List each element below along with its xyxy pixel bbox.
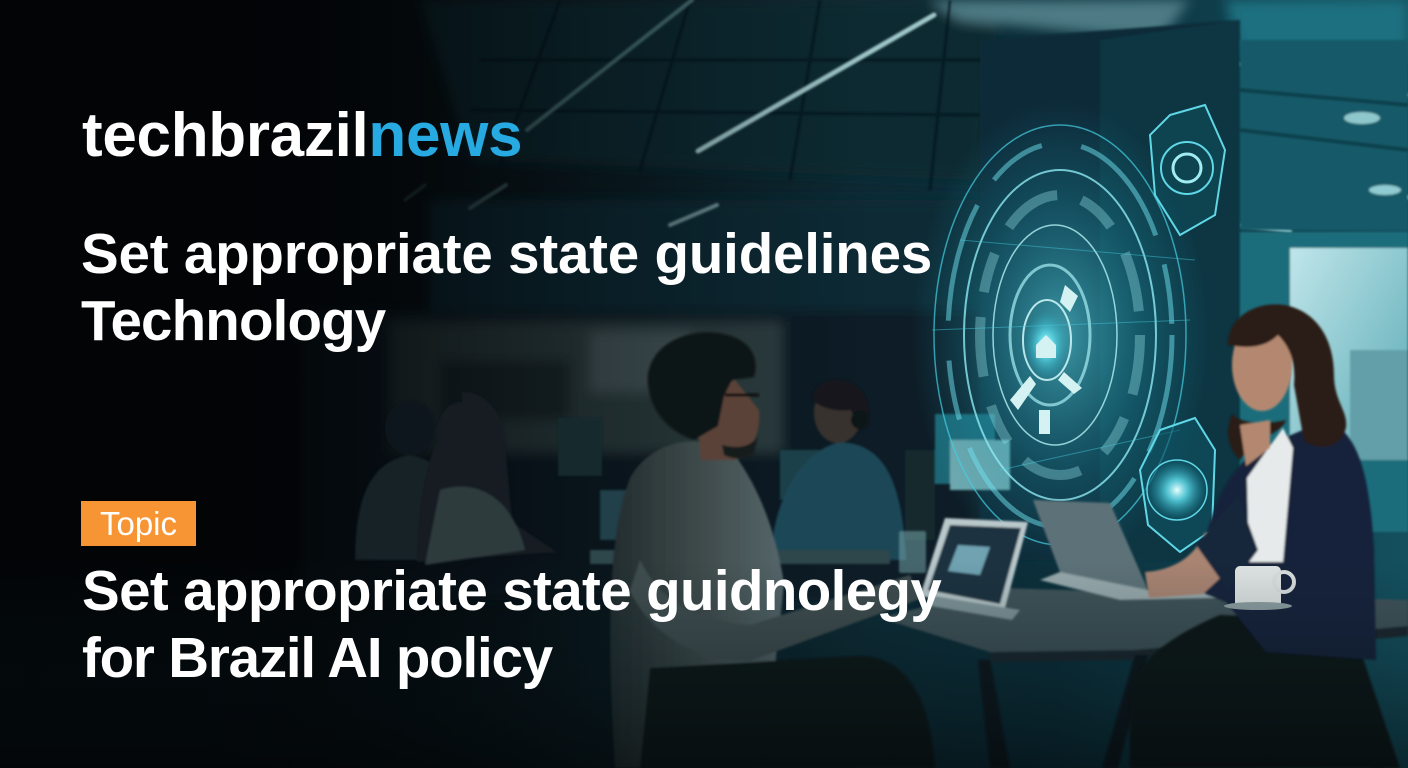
heading: Set appropriate state guidelines Technology bbox=[81, 222, 932, 352]
small hexagon bottom bbox=[1140, 418, 1215, 552]
hologram bbox=[910, 100, 1225, 570]
desk back bbox=[590, 550, 890, 564]
heading: Set appropriate state guidelines Technology: Set appropriate state guidelines bbox=[81, 222, 932, 285]
subheading: Set appropriate state guidnolegy for Brazil AI policy: Set appropriate state guidnolegy bbox=[82, 559, 941, 622]
main man bbox=[610, 332, 935, 768]
logo: techbrazilnews: techbrazilnews bbox=[82, 101, 522, 170]
background people bbox=[355, 392, 630, 565]
window bbox=[1240, 40, 1408, 532]
pillar bbox=[980, 20, 1240, 560]
man with headset bbox=[770, 380, 906, 560]
woman bbox=[1130, 304, 1400, 768]
coffee mug bbox=[1224, 566, 1294, 610]
ceiling beams bbox=[470, 0, 985, 190]
laptop screen bbox=[920, 518, 1028, 620]
floor shade bbox=[0, 560, 1408, 768]
heading: Set appropriate state guidelines Technology: Technology bbox=[81, 289, 385, 352]
small hexagon top bbox=[1150, 105, 1225, 235]
ceiling and back wall bbox=[300, 0, 1408, 600]
subheading: Set appropriate state guidnolegy for Brazil AI policy bbox=[82, 559, 942, 689]
main desk bbox=[880, 588, 1408, 768]
tag: Topic: Topic bbox=[100, 505, 177, 542]
tag: Topic bbox=[81, 501, 196, 546]
monitors right of centre bbox=[780, 414, 1010, 540]
laptop woman bbox=[1033, 500, 1222, 600]
glass on desk bbox=[899, 531, 926, 573]
ceiling lights bbox=[405, 0, 1408, 231]
subheading: Set appropriate state guidnolegy for Brazil AI policy: for Brazil AI policy bbox=[82, 626, 552, 689]
